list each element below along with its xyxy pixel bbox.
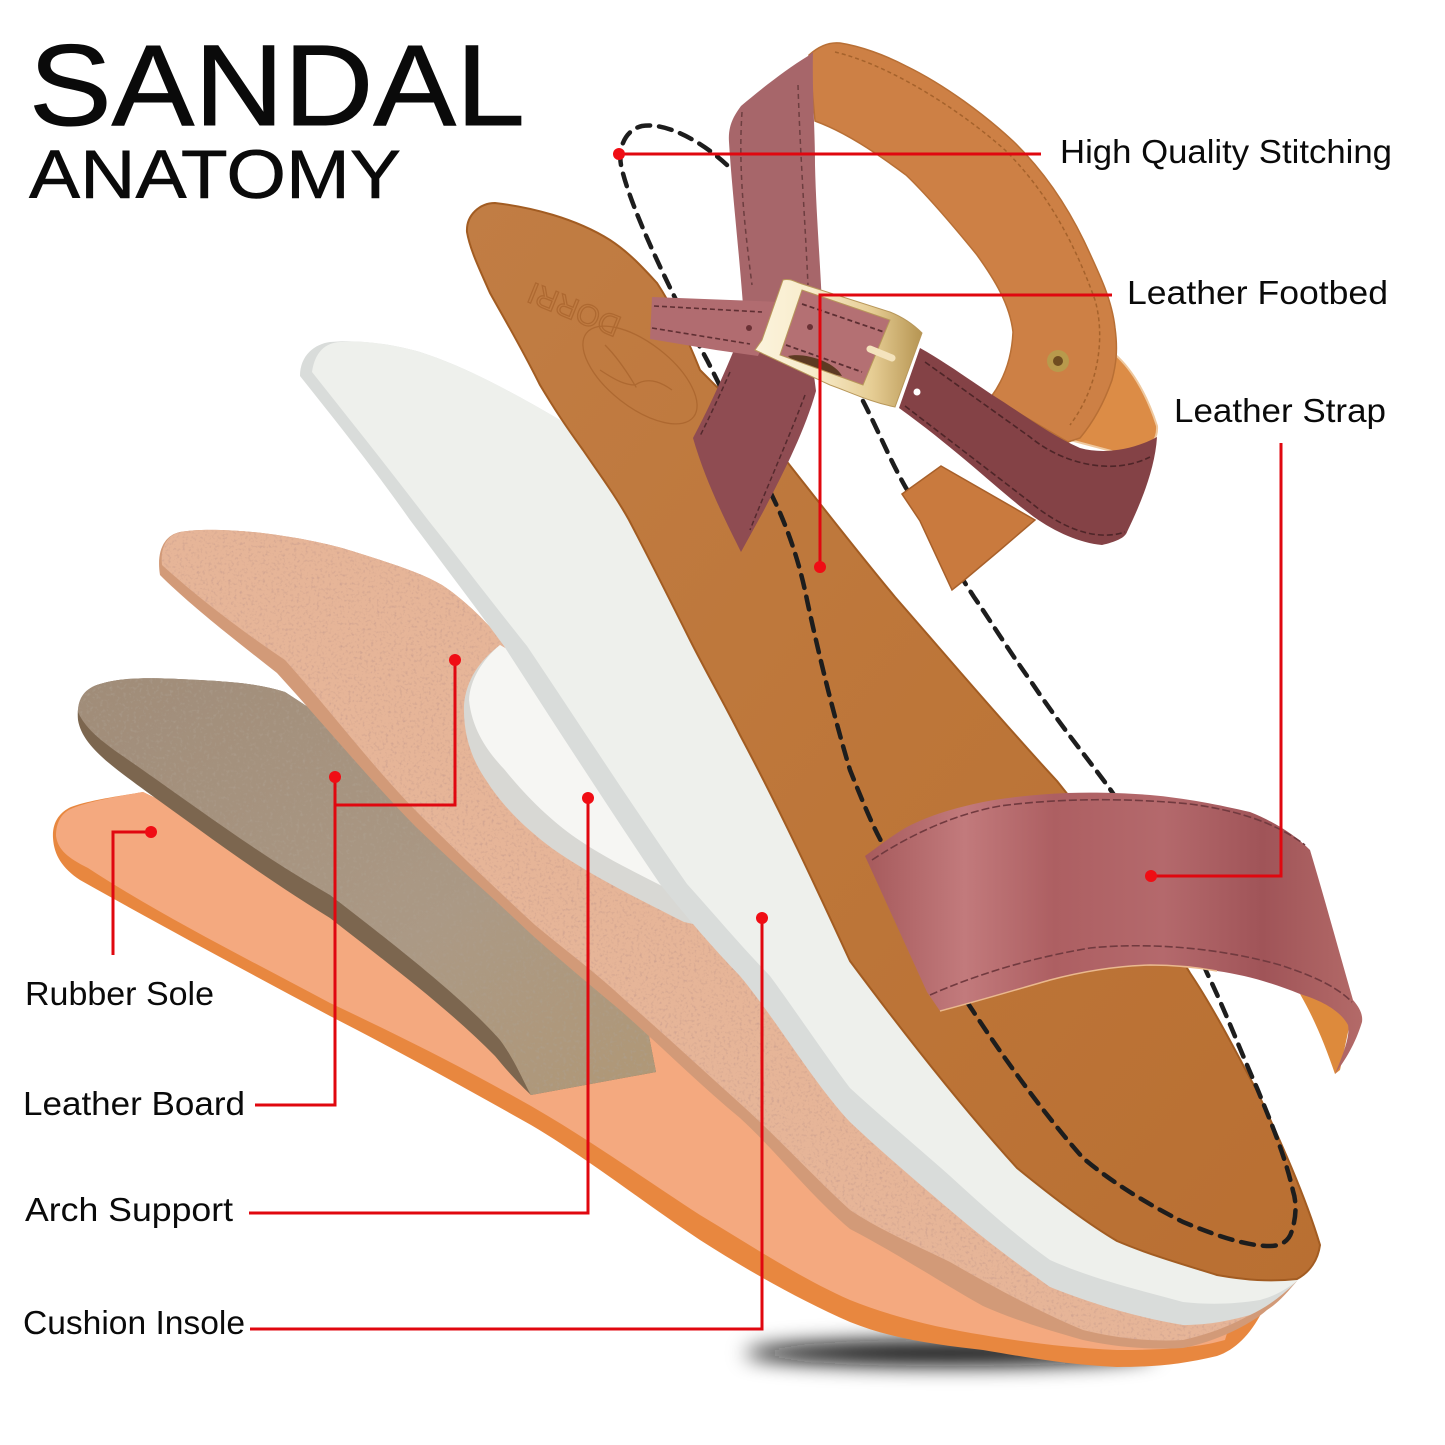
title: ANATOMY xyxy=(29,136,401,213)
callout: arch support xyxy=(25,792,594,1228)
buckle pin xyxy=(870,349,892,358)
ground shadow xyxy=(745,1340,1155,1366)
layer: leather board xyxy=(78,678,656,1095)
grommet xyxy=(1047,350,1069,372)
left strap end xyxy=(650,297,782,356)
callout: high quality stitching: High Quality Stitching xyxy=(1060,133,1392,170)
layer: cushion insole xyxy=(300,341,1320,1325)
ankle strap xyxy=(650,43,1157,590)
layer: rubber sole xyxy=(53,792,1262,1367)
callout: leather strap: Leather Strap xyxy=(1174,392,1386,429)
callout: rubber sole: Rubber Sole xyxy=(25,975,214,1012)
callout: leather board xyxy=(23,654,461,1122)
callout: leather strap xyxy=(1145,392,1386,882)
callout: arch support: Arch Support xyxy=(25,1191,233,1228)
strap through buckle xyxy=(778,288,892,388)
callout: leather board: Leather Board xyxy=(23,1085,245,1122)
layer: cork midsole xyxy=(159,530,1297,1349)
embossed logo xyxy=(523,275,713,442)
callout: cushion insole: Cushion Insole xyxy=(23,1304,245,1341)
gold buckle xyxy=(755,279,922,407)
callout: leather footbed: Leather Footbed xyxy=(1127,274,1388,311)
callout: rubber sole xyxy=(25,826,214,1012)
inner lining xyxy=(809,43,1116,442)
callout: high quality stitching xyxy=(613,133,1392,170)
title xyxy=(29,22,525,213)
title: SANDAL xyxy=(29,22,525,150)
orange tail xyxy=(902,466,1035,590)
embossed logo: DORRI xyxy=(523,275,625,342)
orange loop xyxy=(1070,352,1157,456)
lower back strap xyxy=(693,345,816,552)
stitching outline xyxy=(620,125,1296,1246)
upper back strap xyxy=(729,52,822,305)
layer: arch support xyxy=(464,645,720,930)
callout: leather footbed xyxy=(814,274,1388,573)
callout: cushion insole xyxy=(23,912,768,1341)
front strap xyxy=(865,793,1362,1074)
layer: leather footbed xyxy=(467,203,1320,1280)
dark front ankle strap xyxy=(899,348,1157,545)
